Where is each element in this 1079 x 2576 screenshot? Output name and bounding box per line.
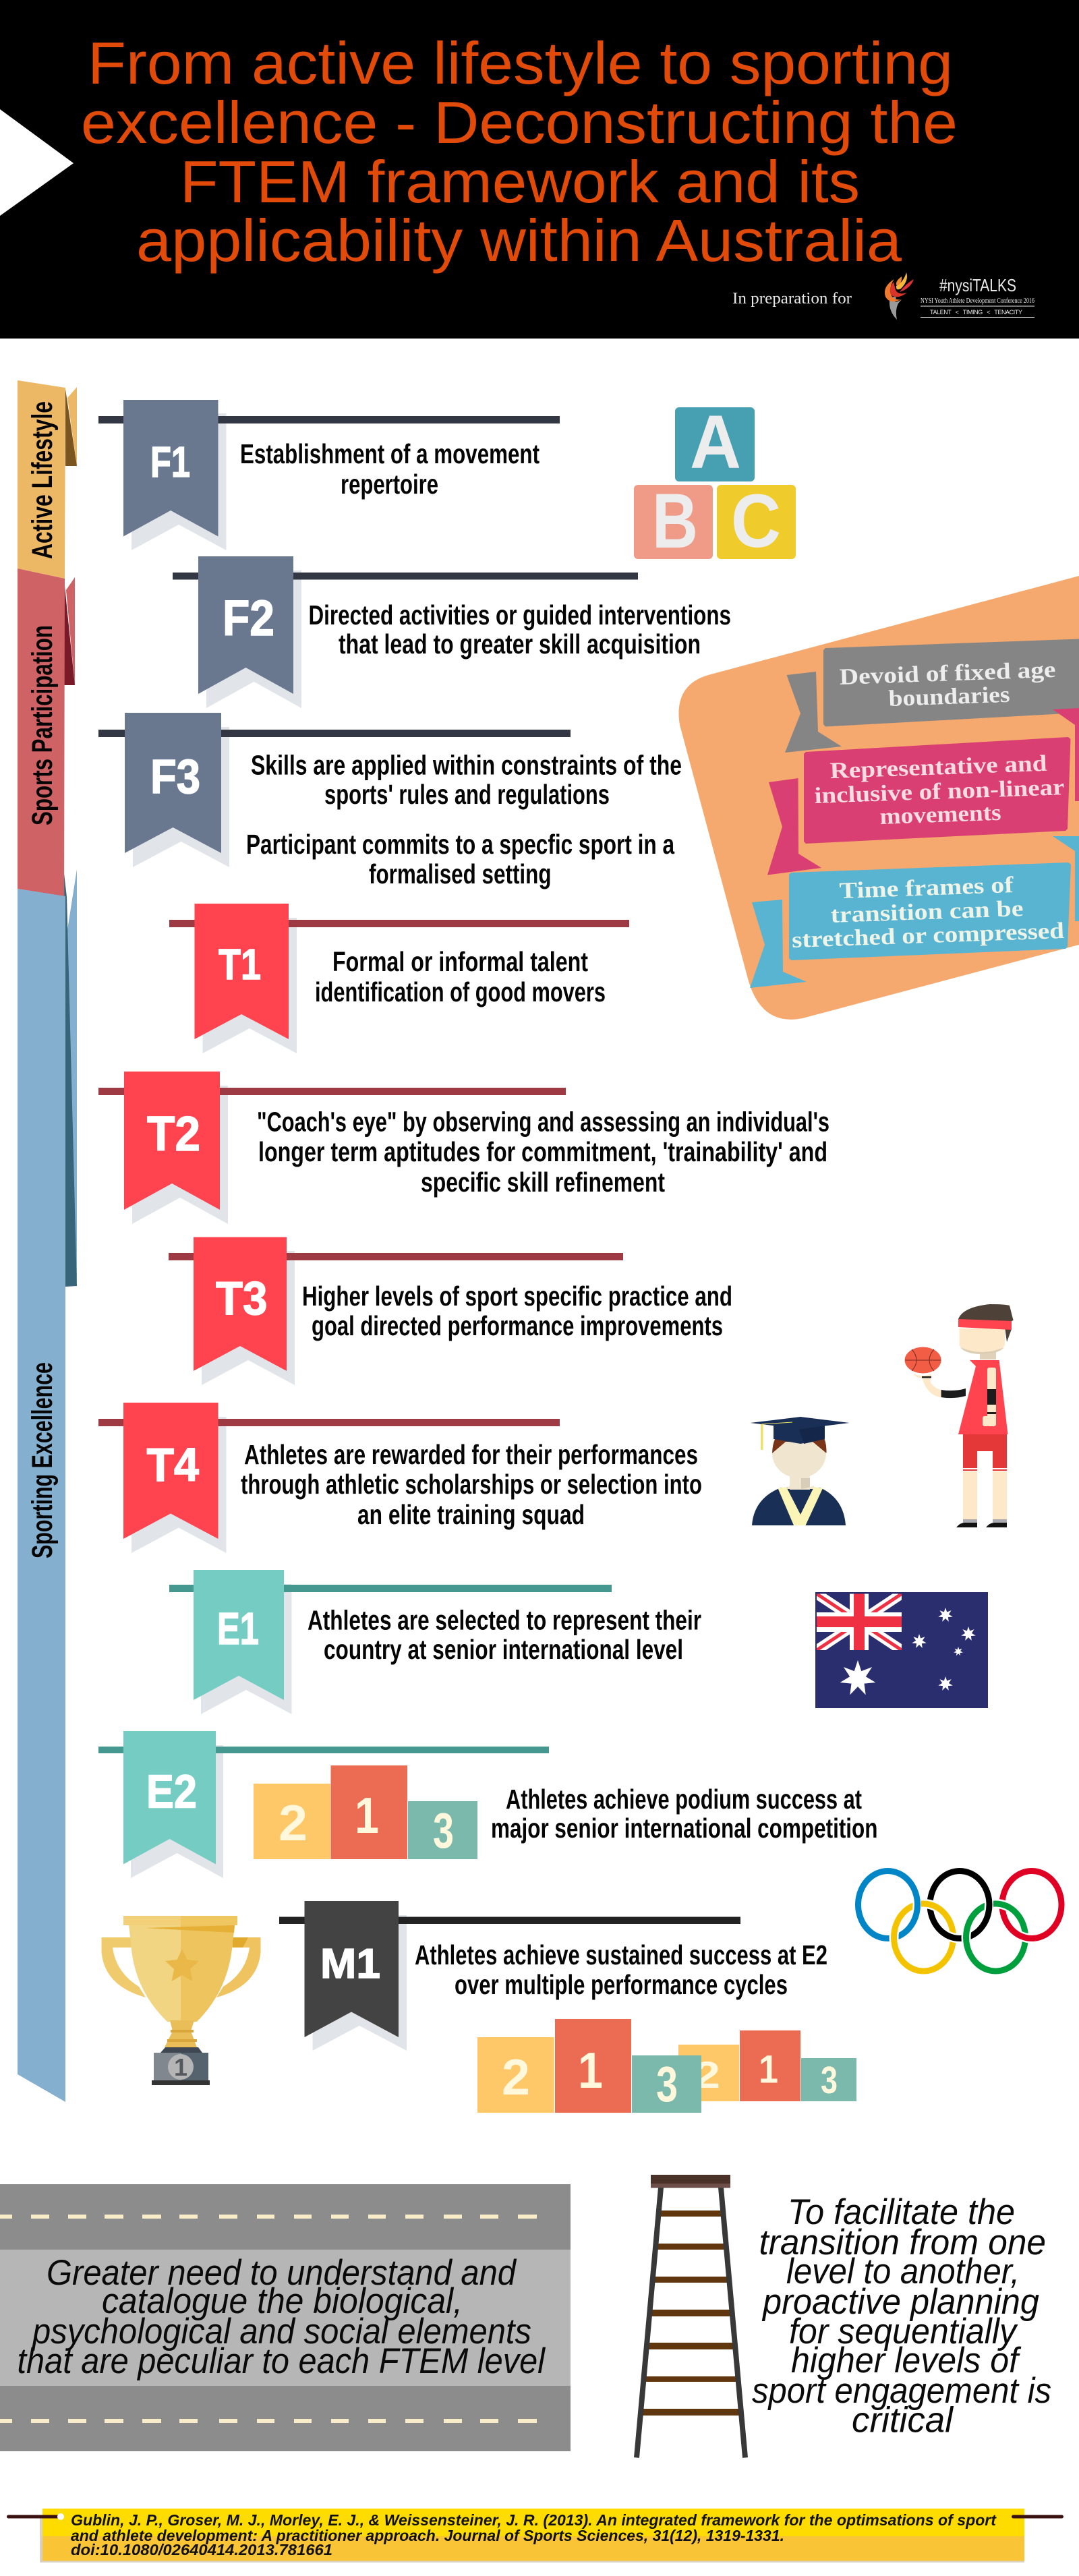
step T2 [98, 1072, 829, 1224]
step T3 [169, 1237, 732, 1385]
icon: podium two: 1 [578, 2042, 603, 2099]
icon: Olympic rings [858, 1871, 1061, 1971]
step E2 [98, 1731, 878, 1878]
banner E2: E2 [146, 1765, 197, 1818]
stage: sporting excellence: Sporting Excellence [26, 1362, 59, 1558]
text F2: that lead to greater skill acquisition [339, 628, 701, 660]
text: planning message: for sequentially [789, 2312, 1018, 2351]
text T2 [257, 1106, 829, 1198]
icon: ABC blocks [634, 400, 796, 564]
text F3 rules: Skills are applied within constraints of the [251, 750, 682, 781]
text: catalogue message: catalogue the biological, [102, 2281, 463, 2321]
sidebar: stage ribbon [18, 380, 77, 2102]
text M1: over multiple performance cycles [455, 1969, 788, 2000]
text T2: longer term aptitudes for commitment, 'trainability' and [258, 1136, 827, 1167]
banner E2 [123, 1731, 216, 1864]
icon: podium two [477, 2019, 701, 2113]
text T3 [302, 1281, 732, 1341]
conference logotype: TALENT < TIMING < TENACITY [930, 309, 1022, 316]
icon: ladder [637, 2175, 745, 2457]
ribbon: time frames of transition: transition can be [830, 896, 1024, 928]
conference logotype [921, 275, 1034, 318]
icon: trophy: 1 [174, 2053, 187, 2081]
banner T4: T4 [147, 1438, 199, 1491]
ribbon: devoid of fixed age boundaries: Devoid of fixed age [839, 657, 1056, 690]
text: catalogue message [18, 2253, 546, 2381]
text F1 [240, 438, 540, 500]
ribbon: representative and inclusive: movements [879, 800, 1001, 829]
text E1 [308, 1605, 701, 1665]
banner T4 [123, 1403, 218, 1539]
text: catalogue message: Greater need to understand and [47, 2253, 517, 2293]
icon: white arrow [0, 109, 74, 216]
ribbon: devoid of fixed age boundaries [785, 639, 1079, 753]
text E1: Athletes are selected to represent their [308, 1605, 701, 1636]
text F3 rules [251, 750, 682, 810]
title: FTEM framework and its [180, 148, 860, 215]
text T1 [315, 946, 606, 1007]
step E1 [169, 1570, 701, 1714]
text T3: goal directed performance improvements [312, 1310, 723, 1341]
text: citation [71, 2511, 997, 2558]
ribbon: time frames of transition: Time frames of [839, 873, 1014, 904]
conference logotype: NYSI Youth Athlete Development Conference 2016 [921, 297, 1034, 305]
ribbon: time frames of transition: stretched or compressed [791, 918, 1065, 953]
step F2 [173, 556, 731, 708]
ribbon: time frames of transition [750, 836, 1079, 988]
banner F1 [123, 400, 218, 537]
step T4 [98, 1403, 702, 1553]
stage: sporting excellence [18, 869, 77, 2102]
text E2: major senior international competition [491, 1813, 878, 1844]
stage: sports participation: Sports Participation [26, 625, 59, 825]
banner F3: F3 [150, 751, 200, 804]
text E2 [491, 1784, 878, 1844]
text M1: Athletes achieve sustained success at E2 [415, 1939, 827, 1970]
ribbon: devoid of fixed age boundaries: boundaries [888, 682, 1010, 711]
banner T2: T2 [147, 1107, 200, 1161]
text: citation: Gublin, J. P., Groser, M. J., Morley, E. J., & Weissensteiner, J. R. (2013). An integrated framework for the optimsations of sport [71, 2511, 997, 2529]
icon: basketball player [905, 1304, 1014, 1527]
text: planning message: level to another, [786, 2252, 1020, 2291]
banner T1: T1 [218, 940, 261, 989]
banner T3 [194, 1237, 287, 1371]
ribbon: representative and inclusive: Representative and [829, 751, 1047, 784]
banner F2 [198, 556, 293, 694]
text: planning message: higher levels of [791, 2341, 1022, 2380]
step T1 [169, 904, 629, 1053]
text T2: specific skill refinement [421, 1167, 665, 1198]
text: planning message: critical [852, 2401, 954, 2440]
icon: ABC blocks: A [690, 400, 741, 484]
text T4: an elite training squad [357, 1499, 585, 1530]
conference logotype: #nysiTALKS [939, 275, 1016, 295]
panel: orange FTEM features [678, 576, 1079, 1020]
text F1: Establishment of a movement [240, 438, 540, 469]
banner T2 [124, 1072, 220, 1210]
text T1: Formal or informal talent [332, 946, 588, 977]
header panel [0, 0, 1079, 339]
step F3 [98, 713, 682, 889]
union jack [817, 1594, 902, 1651]
stars [840, 1608, 976, 1695]
text F2: Directed activities or guided interventions [309, 599, 731, 631]
banner M1 [305, 1901, 399, 2037]
icon: podium three: 3 [821, 2059, 838, 2102]
text T4 [241, 1439, 702, 1530]
text: catalogue message: psychological and social elements [31, 2312, 531, 2351]
icon: podium one [254, 1765, 477, 1859]
icon: ABC blocks: C [731, 479, 781, 563]
text: in preparation for: In preparation for [732, 290, 852, 308]
text: planning message [752, 2192, 1051, 2440]
text F3 commitment [246, 829, 675, 889]
icon: flame logo [885, 272, 914, 320]
text: planning message: proactive planning [761, 2282, 1039, 2322]
panel: road with catalogue message [0, 2184, 571, 2451]
icon: podium two: 3 [656, 2056, 678, 2112]
stage: active lifestyle: Active Lifestyle [26, 401, 59, 559]
text F1: repertoire [341, 469, 438, 500]
road dashes bottom [0, 2419, 537, 2423]
banner F3 [125, 713, 221, 853]
text T4: Athletes are rewarded for their performances [244, 1439, 698, 1470]
banner handles [7, 2513, 1063, 2520]
banner T3: T3 [216, 1272, 267, 1324]
text: planning message: sport engagement is [752, 2371, 1051, 2411]
banner M1: M1 [320, 1941, 380, 1987]
citation banner [7, 2509, 1063, 2563]
text: planning message: To facilitate the [788, 2192, 1015, 2232]
ribbon: representative and inclusive: inclusive of non-linear [814, 775, 1065, 809]
step F1 [98, 400, 560, 550]
icon: ABC blocks: B [652, 478, 698, 564]
ball [905, 1347, 941, 1373]
road dashes top [0, 2215, 537, 2219]
text: citation: and athlete development: A practitioner approach. Journal of Sports Sciences, 31(12), 1319-1331. [71, 2527, 784, 2544]
icon: podium three [678, 2030, 856, 2102]
text: planning message: transition from one [759, 2223, 1046, 2262]
banner E1 [194, 1570, 284, 1700]
banner F2: F2 [223, 590, 274, 646]
stage: sports participation [18, 568, 75, 896]
banner F1: F1 [150, 438, 190, 486]
icon: graduate [750, 1417, 850, 1525]
text: catalogue message: that are peculiar to each FTEM level [18, 2341, 546, 2381]
text E1: country at senior international level [324, 1634, 683, 1665]
stage: active lifestyle [18, 380, 77, 579]
title: excellence - Deconstructing the [81, 89, 958, 156]
text E2: Athletes achieve podium success at [506, 1784, 862, 1815]
icon: podium one: 1 [355, 1787, 379, 1844]
banner T1 [194, 904, 289, 1039]
icon: podium one: 3 [433, 1803, 454, 1858]
text F3 commitment: Participant commits to a specfic sport in a [246, 829, 675, 860]
icon: podium two: 2 [502, 2049, 530, 2105]
text F2 [309, 599, 731, 660]
icon: Australian flag [815, 1592, 988, 1708]
text T3: Higher levels of sport specific practice and [302, 1281, 732, 1312]
ribbon: representative and inclusive [767, 708, 1079, 875]
title: From active lifestyle to sporting [88, 30, 953, 96]
text M1 [415, 1939, 827, 2000]
icon: trophy [101, 1916, 260, 2085]
icon: podium one: 2 [279, 1794, 308, 1851]
title [81, 30, 958, 274]
banner E1: E1 [217, 1604, 259, 1654]
text F3 rules: sports' rules and regulations [324, 779, 610, 810]
text: citation: doi:10.1080/02640414.2013.781661 [71, 2541, 332, 2558]
title: applicability within Australia [136, 207, 902, 274]
text T4: through athletic scholarships or selection into [241, 1469, 702, 1500]
text T1: identification of good movers [315, 976, 606, 1007]
icon: podium three: 1 [759, 2047, 778, 2092]
step M1 [279, 1901, 827, 2051]
text T2: "Coach's eye" by observing and assessing an individual's [257, 1106, 829, 1137]
text F3 commitment: formalised setting [369, 858, 552, 889]
icon: podium three: 2 [694, 2053, 720, 2096]
